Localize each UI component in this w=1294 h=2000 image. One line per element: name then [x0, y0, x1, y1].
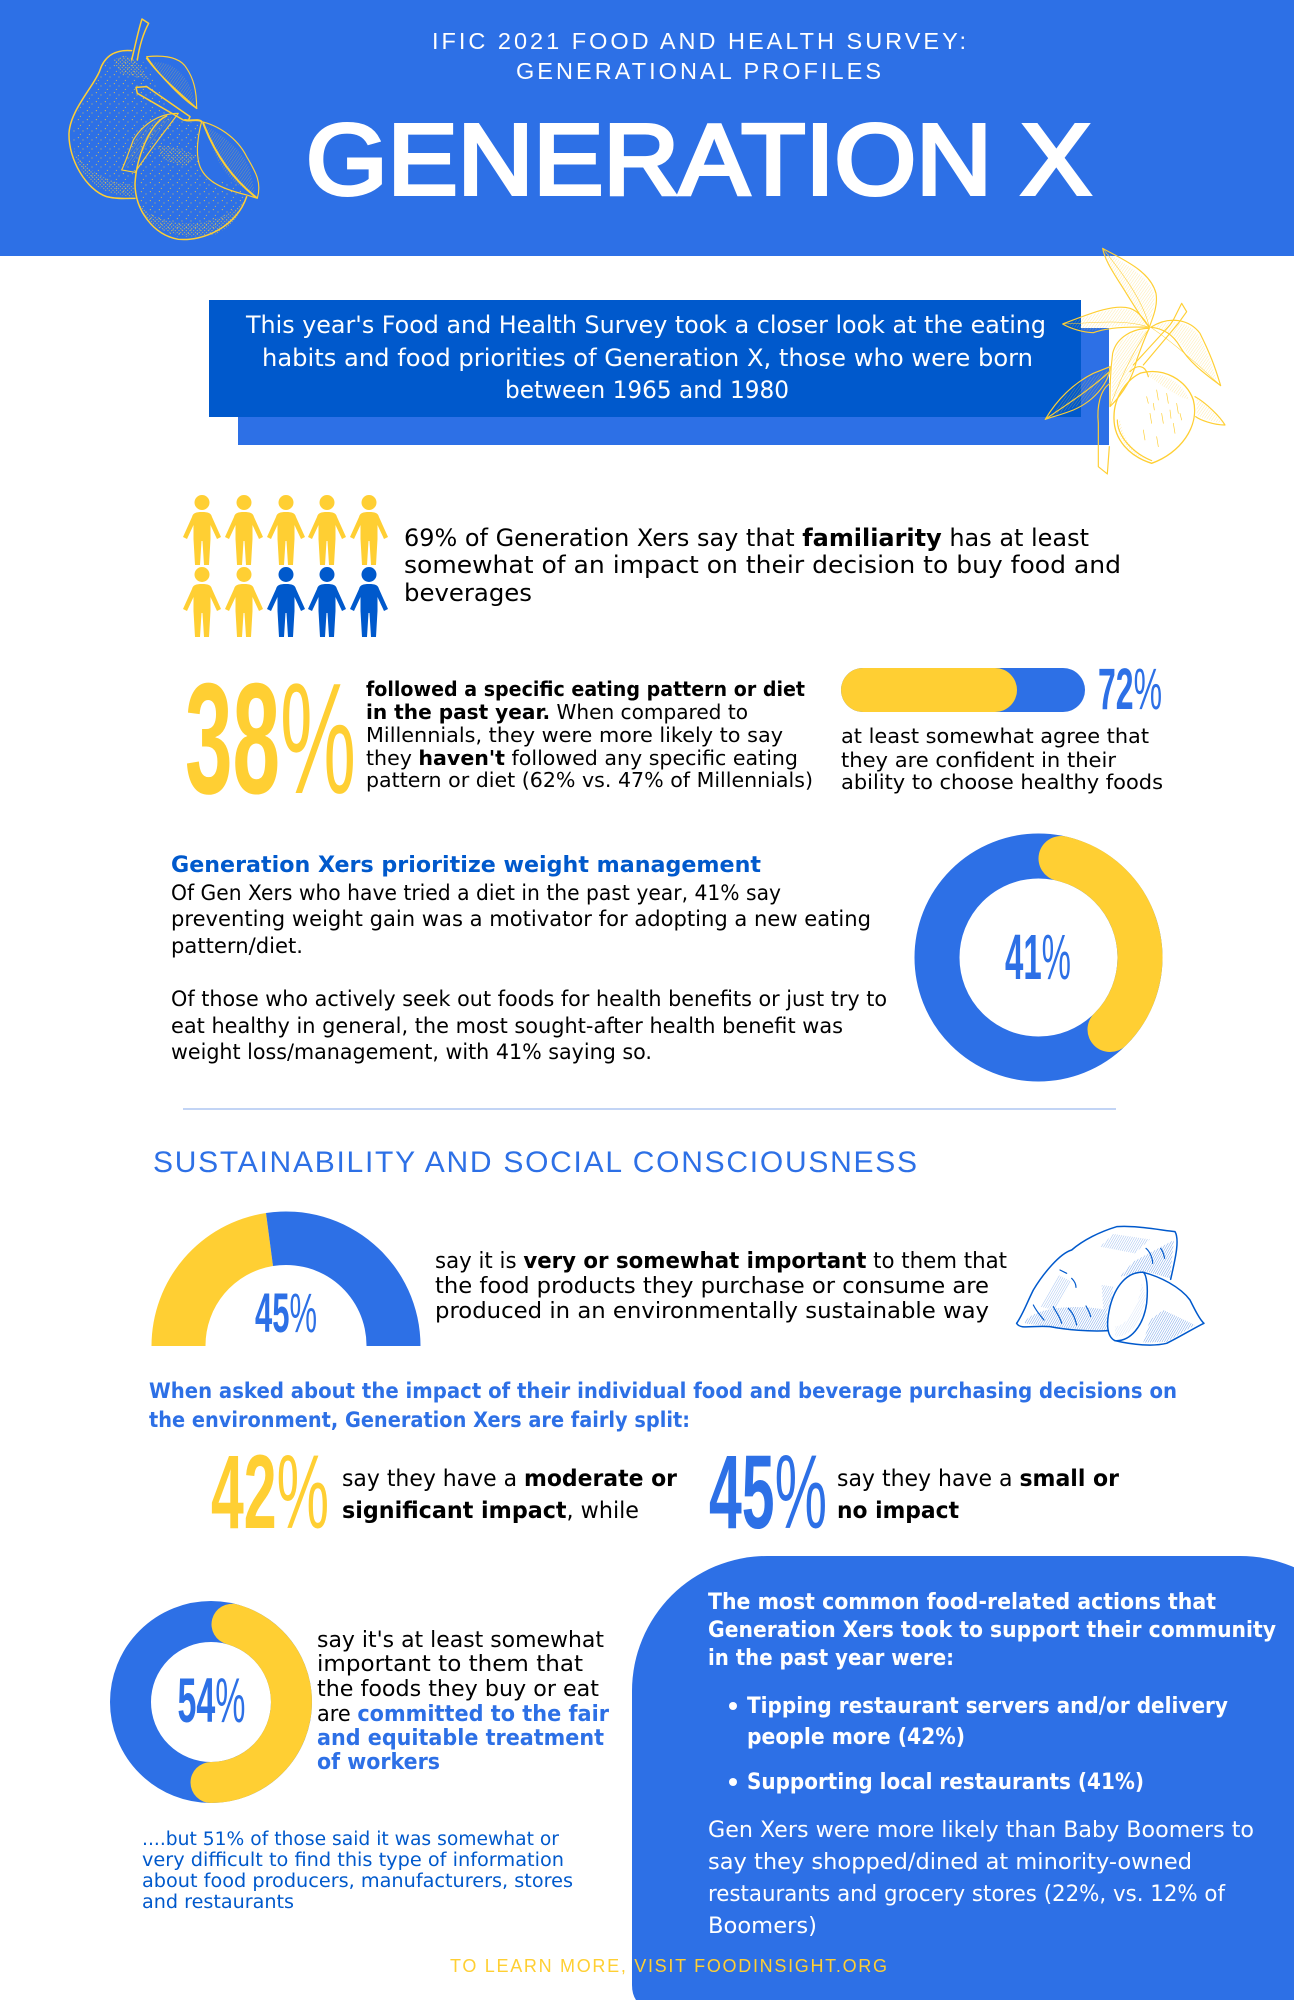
intro text: habits and food priorities of Generation X, those who were born	[262, 344, 1033, 372]
survey subtitle	[432, 28, 966, 84]
difficulty note	[142, 1829, 573, 1913]
stat: 38 percent: 38%	[185, 651, 356, 827]
panel: community actions	[632, 1556, 1294, 2000]
fair treatment text: important to them that	[317, 1652, 583, 1677]
progress bar: 72 percent	[841, 668, 1085, 712]
difficulty note: very difficult to find this type of information	[142, 1850, 564, 1871]
moderate impact text: significant impact, while	[342, 1496, 639, 1524]
intro shadow box	[238, 328, 1109, 445]
intro callout	[209, 300, 1109, 445]
eating pattern text	[366, 677, 813, 792]
icon: sweet potato illustration	[1017, 1226, 1204, 1345]
environmental importance text: say it is very or somewhat important to them that	[435, 1249, 1007, 1274]
fair treatment text	[317, 1628, 609, 1775]
familiarity text: 69% of Generation Xers say that familiarity has at least	[404, 524, 1089, 552]
weight management text: Of those who actively seek out foods for health benefits or just try to	[171, 987, 887, 1011]
donut value: 41%	[1005, 921, 1071, 993]
confidence text: ability to choose healthy foods	[841, 770, 1163, 794]
small impact text	[837, 1464, 1119, 1524]
donut chart: 41 percent	[937, 856, 1140, 1059]
fair treatment text: are committed to the fair	[317, 1702, 609, 1727]
panel paragraph: Boomers)	[708, 1914, 817, 1939]
people pictogram: 69 percent	[183, 495, 388, 637]
panel paragraph	[708, 1818, 1254, 1939]
confidence text: at least somewhat agree that	[841, 724, 1149, 748]
survey subtitle: IFIC 2021 FOOD AND HEALTH SURVEY:	[432, 28, 966, 54]
environmental importance text: produced in an environmentally sustainable way	[435, 1299, 989, 1324]
difficulty note: ....but 51% of those said it was somewhat or	[142, 1829, 559, 1850]
difficulty note: about food producers, manufacturers, stores	[142, 1871, 573, 1892]
fair treatment text: of workers	[317, 1750, 440, 1775]
moderate impact text	[342, 1464, 677, 1524]
intro main box	[209, 300, 1081, 417]
eating pattern text: in the past year. When compared to	[366, 700, 748, 724]
half donut chart: 45 percent	[152, 1212, 420, 1346]
environmental importance text: the food products they purchase or consume are	[435, 1274, 989, 1299]
icon: peach branch illustration	[1045, 248, 1225, 474]
eating pattern text: Millennials, they were more likely to say	[366, 723, 783, 747]
intro text	[245, 311, 1046, 404]
familiarity text	[404, 524, 1121, 607]
intro text: This year's Food and Health Survey took a closer look at the eating	[245, 311, 1046, 339]
confidence text: they are confident in their	[841, 748, 1117, 772]
environmental importance text	[435, 1249, 1007, 1324]
moderate impact text: say they have a moderate or	[342, 1464, 677, 1492]
familiarity text: somewhat of an impact on their decision to buy food and	[404, 551, 1121, 579]
weight management text: Of Gen Xers who have tried a diet in the past year, 41% say	[171, 881, 781, 905]
environment impact heading	[149, 1379, 1177, 1433]
fair treatment text: the foods they buy or eat	[317, 1677, 599, 1702]
bullet list: Tipping restaurant servers and/or delivery	[747, 1694, 1228, 1719]
confidence text	[841, 724, 1163, 794]
survey subtitle: GENERATIONAL PROFILES	[516, 58, 881, 84]
footer link text: TO LEARN MORE, VISIT FOODINSIGHT.ORG	[450, 1956, 887, 1976]
fair treatment text: say it's at least somewhat	[317, 1628, 604, 1653]
donut value: 54%	[178, 1666, 246, 1736]
panel paragraph: Gen Xers were more likely than Baby Boomers to	[708, 1818, 1254, 1843]
familiarity text: beverages	[404, 579, 532, 607]
panel heading: The most common food-related actions that	[708, 1590, 1216, 1615]
weight management text: preventing weight gain was a motivator for adopting a new eating	[171, 907, 871, 931]
eating pattern text: they haven't followed any specific eating	[366, 746, 798, 770]
main title: GENERATION X	[306, 104, 1091, 216]
panel paragraph: restaurants and grocery stores (22%, vs. 12% of	[708, 1882, 1226, 1907]
eating pattern text: pattern or diet (62% vs. 47% of Millennials)	[366, 768, 813, 792]
icon: pears illustration	[69, 19, 259, 240]
half donut value: 45%	[255, 1281, 317, 1344]
difficulty note: and restaurants	[142, 1892, 294, 1913]
stat: 42 percent: 42%	[211, 1434, 329, 1551]
small impact text: say they have a small or	[837, 1464, 1119, 1492]
weight management text: eat healthy in general, the most sought-after health benefit was	[171, 1014, 843, 1038]
weight management text: weight loss/management, with 41% saying so.	[171, 1040, 652, 1064]
environment impact heading: When asked about the impact of their individual food and beverage purchasing decisions on	[149, 1379, 1177, 1404]
weight management text	[171, 881, 887, 1064]
donut chart: 54 percent	[130, 1622, 292, 1782]
environment impact heading: the environment, Generation Xers are fairly split:	[149, 1408, 690, 1433]
stat: 72 percent: 72%	[1098, 657, 1162, 722]
weight management text: pattern/diet.	[171, 934, 303, 958]
panel heading	[708, 1590, 1276, 1671]
bullet list: people more (42%)	[747, 1725, 965, 1750]
bullet list: Supporting local restaurants (41%)	[747, 1770, 1144, 1795]
intro text: between 1965 and 1980	[505, 376, 789, 404]
header band	[0, 0, 1294, 256]
panel paragraph: say they shopped/dined at minority-owned	[708, 1850, 1192, 1875]
bullet list	[729, 1694, 1228, 1795]
heading: weight management: Generation Xers prioritize weight management	[171, 852, 761, 878]
fair treatment text: and equitable treatment	[317, 1726, 604, 1751]
stat: 45 percent: 45%	[709, 1434, 827, 1551]
section heading: sustainability: SUSTAINABILITY AND SOCIAL CONSCIOUSNESS	[153, 1146, 917, 1179]
eating pattern text: followed a specific eating pattern or diet	[366, 677, 805, 701]
small impact text: no impact	[837, 1496, 959, 1524]
panel heading: in the past year were:	[708, 1646, 954, 1671]
